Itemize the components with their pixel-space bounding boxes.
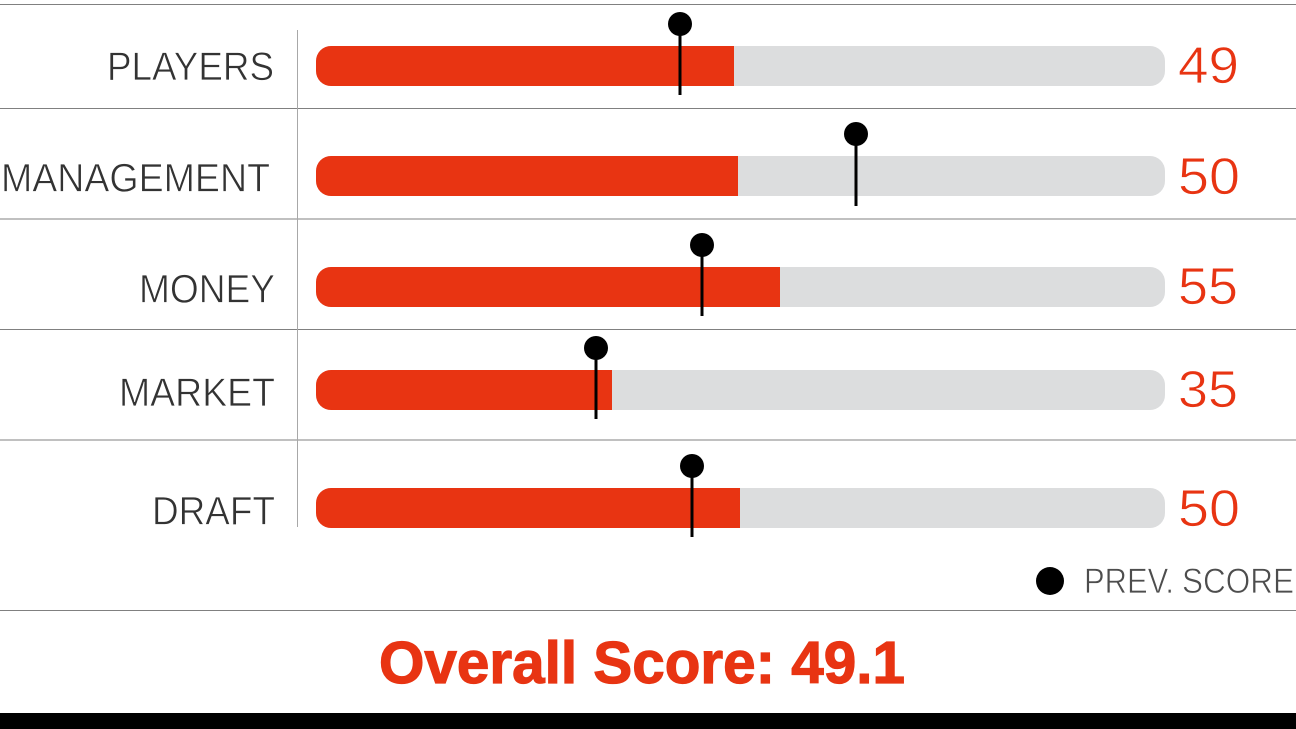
row: draft: [152, 454, 1240, 538]
marker: management previous score: [844, 122, 868, 206]
marker: players previous score: [668, 12, 692, 95]
score: market: 35: [1178, 361, 1238, 419]
marker: market previous score: [584, 336, 608, 419]
label: draft: DRAFT: [152, 490, 275, 534]
bar: draft: [316, 488, 1165, 528]
marker: money previous score: [690, 233, 714, 316]
score: players: 49: [1178, 37, 1239, 95]
legend: previous score: [1036, 562, 1294, 601]
bar: management: [316, 156, 1165, 196]
label: players: PLAYERS: [107, 45, 274, 89]
label: market: MARKET: [119, 371, 275, 415]
bar: money: [316, 267, 1165, 307]
legend: previous score: PREV.: [1084, 562, 1174, 601]
row: players: [107, 12, 1239, 95]
row: management: [1, 122, 1240, 206]
score: management: 50: [1178, 148, 1240, 206]
row: money: [139, 233, 1238, 316]
overall score: Overall Score: 49.1: [379, 630, 905, 696]
label: money: MONEY: [139, 268, 275, 312]
bar: market: [316, 370, 1165, 410]
score: money: 55: [1178, 258, 1238, 316]
marker: draft previous score: [680, 454, 704, 537]
score: draft: 50: [1178, 480, 1240, 538]
label: management: MANAGEMENT: [1, 156, 270, 200]
bar: players: [316, 46, 1165, 86]
row: market: [119, 336, 1238, 419]
bottom black band: [0, 713, 1296, 729]
